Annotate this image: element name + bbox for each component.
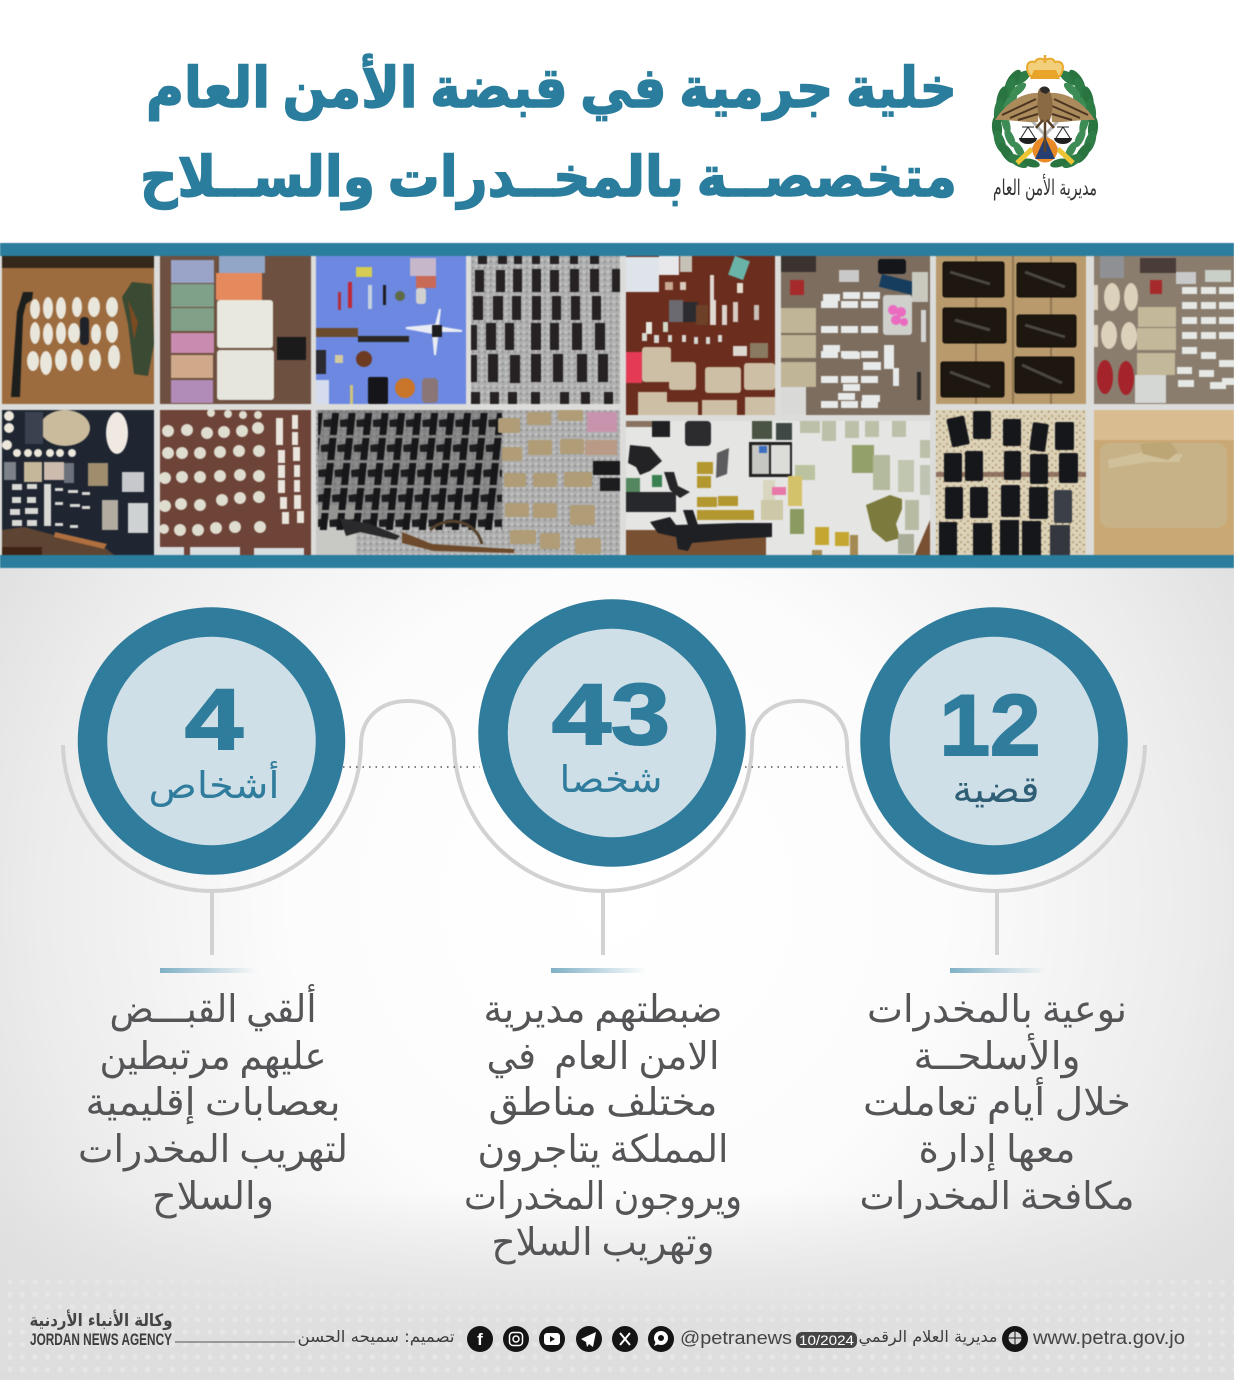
photo: powder bags on red table: [626, 256, 775, 415]
photo strip: seized items: [0, 243, 1234, 568]
photo: six dark blocks on wood: [936, 256, 1086, 404]
icon: youtube: [539, 1326, 565, 1352]
text block: left column: والسلاح: [152, 1174, 274, 1219]
photo: tablets, bags and pink pills on wood: [781, 256, 930, 415]
footer: [30, 1310, 1185, 1352]
top band: [0, 243, 1234, 256]
text block: middle column: المملكة يتاجرون: [478, 1127, 728, 1172]
text block: left column: لتهريب المخدرات: [78, 1127, 348, 1172]
stat ring: [493, 614, 731, 852]
stat label: أشخاص: [148, 761, 280, 807]
icon: whatsapp: [648, 1326, 674, 1352]
connector curve: [63, 701, 1145, 891]
photo: tools and knives on blue cloth: [316, 256, 466, 404]
icon: facebook: [467, 1326, 493, 1352]
stat: 12 cases: [875, 622, 1113, 860]
text block: middle column: ضبطتهم مديرية: [484, 987, 722, 1032]
stat ring: [92, 622, 330, 860]
title: [140, 53, 957, 210]
text block: right column: مكافحة المخدرات: [860, 1174, 1134, 1218]
text block: middle column: ويروجون المخدرات: [464, 1174, 742, 1219]
text block: left column: عليهم مرتبطين: [100, 1034, 326, 1079]
photo: rifle, ammunition and plant bags on white: [626, 421, 930, 555]
stat number: 4: [185, 672, 243, 768]
stat label: شخصا: [560, 758, 662, 801]
dotted connector: [343, 766, 843, 768]
photo: pistols, rifles and bricks on floor: [316, 410, 620, 555]
logo wordmark: مديرية الأمن العام: [993, 174, 1097, 201]
icon: instagram: [503, 1326, 529, 1352]
agency name: وكالة الأنباء الأردنية: [30, 1310, 172, 1331]
text block: right column: والأسلحــة: [914, 1032, 1080, 1079]
stem lines: [212, 893, 997, 955]
text block: right column: [860, 987, 1134, 1218]
title line 1: خلية جرمية في قبضة الأمن العام: [146, 53, 957, 121]
stat number: 43: [552, 667, 670, 763]
agency name: [30, 1310, 172, 1349]
agency logo: Public Security Directorate emblem: [991, 55, 1099, 201]
stat: 43 persons: [493, 614, 731, 852]
designer credit: تصميم: سميحه الحسن: [298, 1327, 454, 1347]
photo: black phones on speckled floor: [936, 410, 1086, 555]
stat label: قضية: [952, 768, 1040, 811]
icon: facebook: f: [477, 1330, 483, 1349]
photo: pills and rifle on dark table: [2, 410, 154, 555]
department name: مديرية العلام الرقمي: [858, 1327, 998, 1347]
photo: wrapped tan block on wood: [1094, 410, 1234, 555]
photo: white pills on brown table: [159, 409, 311, 555]
text block: left column: ألقي القبـــض: [110, 984, 316, 1032]
icon: telegram: [576, 1326, 602, 1352]
photo: cash bundles and white bags: [160, 256, 311, 404]
icon: wreath: [991, 67, 1099, 171]
stat number: 12: [940, 678, 1040, 774]
agency name: JORDAN NEWS AGENCY: [30, 1330, 172, 1349]
text block: right column: نوعية بالمخدرات: [867, 987, 1127, 1032]
social handle: @petranews: [680, 1327, 792, 1348]
title line 2: متخصصــة بالمخــدرات والســلاح: [140, 145, 957, 210]
text block: middle column: مختلف مناطق: [488, 1080, 718, 1125]
icon: globe: [1002, 1326, 1028, 1352]
text block: middle column: الامن العام في: [486, 1034, 720, 1079]
icon: crown: [1027, 55, 1063, 79]
accent rules: [160, 968, 1046, 973]
text block: left column: بعصابات إقليمية: [86, 1080, 340, 1125]
icon: falcon: [995, 87, 1095, 152]
icon: swords and scales: [1017, 112, 1073, 163]
date pill: 10/2024: [799, 1332, 854, 1348]
text block: middle column: [464, 987, 742, 1265]
photo: rifles and white packets on sand: [2, 256, 154, 404]
stat: 4 persons: [92, 622, 330, 860]
photo: rifle magazines on speckled floor: [471, 256, 620, 404]
stat ring: [875, 622, 1113, 860]
text block: left column: [78, 984, 348, 1219]
website: www.petra.gov.jo: [1032, 1328, 1185, 1349]
text block: right column: خلال أيام تعاملت: [863, 1077, 1131, 1124]
text block: middle column: وتهريب السلاح: [492, 1220, 714, 1265]
icon: X: [612, 1326, 638, 1352]
text block: right column: معها إدارة: [918, 1127, 1076, 1172]
bottom band: [0, 555, 1234, 568]
footer dotted background: [0, 1190, 1234, 1380]
photo: packets, bags and red bottles: [1094, 256, 1234, 404]
